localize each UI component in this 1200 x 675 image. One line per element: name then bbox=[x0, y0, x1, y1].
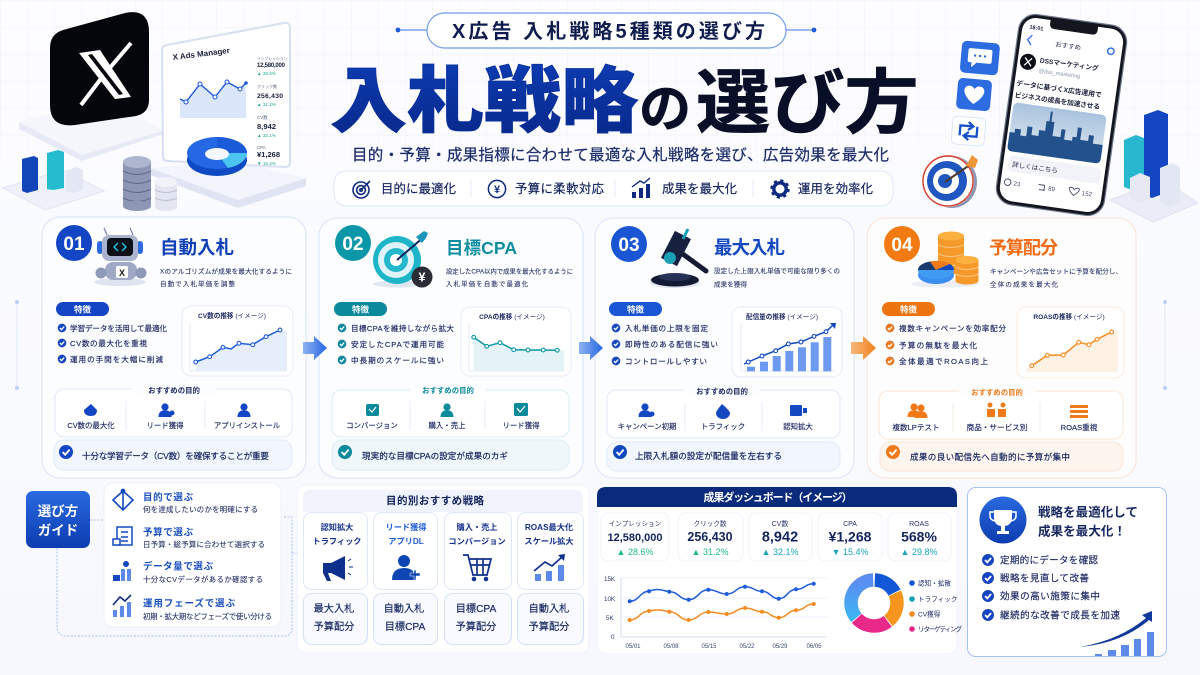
panel metrics bbox=[257, 56, 287, 166]
line chart: ROAS trend: ROASの推移 (イメージ) bbox=[1033, 312, 1105, 321]
line chart: weekly results: 05/29 bbox=[772, 644, 788, 650]
post actions: 152 bbox=[1081, 190, 1093, 199]
feature list bbox=[338, 323, 454, 365]
recommended goals: おすすめの目的 bbox=[971, 388, 1023, 397]
line chart: ROAS trend bbox=[1017, 307, 1124, 378]
guide connectors bbox=[57, 517, 298, 636]
feature list: 複数キャンペーンを効率配分 bbox=[899, 323, 1006, 333]
heading: 戦略を最適化して bbox=[1038, 504, 1138, 520]
KPI: clicks bbox=[678, 513, 743, 561]
feature list: 予算の無駄を最大化 bbox=[899, 340, 977, 350]
KPI: CPA bbox=[818, 513, 882, 561]
card title: 自動入札 bbox=[160, 237, 234, 258]
column 2: 目標CPA bbox=[385, 620, 425, 633]
feature list: 入札単価の上限を固定 bbox=[625, 323, 708, 333]
guide item: budget: 予算で選ぶ bbox=[143, 526, 193, 538]
bar line chart: delivery trend bbox=[732, 307, 842, 377]
growth bars and arrow bbox=[1080, 611, 1154, 656]
number badge bbox=[335, 225, 371, 261]
column 1: 認知拡大 bbox=[321, 522, 353, 532]
column 4: スケール拡大 bbox=[524, 536, 574, 546]
recommended goals: 商品・サービス別 bbox=[967, 422, 1027, 432]
icon: retweet tile bbox=[951, 116, 986, 146]
icon: gear bbox=[771, 180, 789, 198]
panel metrics: CPA bbox=[257, 145, 266, 150]
KPI: impressions: ▲ 28.6% bbox=[617, 547, 653, 557]
post link: 詳しくはこちら bbox=[1012, 160, 1059, 175]
column 1 bbox=[304, 512, 368, 644]
feature list: 全体最適でROAS向上 bbox=[899, 356, 988, 366]
feature list: 運用の手間を大幅に削減 bbox=[70, 354, 163, 364]
feature pill: 特徴 bbox=[627, 304, 644, 314]
heading: 成果を最大化！ bbox=[1038, 524, 1126, 538]
feature list: 学習データを活用して最適化 bbox=[70, 323, 167, 333]
panel metrics: 12,580,000 bbox=[257, 63, 286, 69]
heading bbox=[1038, 504, 1138, 538]
post link bbox=[1007, 155, 1102, 184]
number badge bbox=[56, 225, 92, 261]
tip: 上限入札額の設定が配信量を左右する bbox=[635, 450, 782, 461]
smartphone bbox=[994, 12, 1129, 218]
panel: optimize call to action bbox=[968, 488, 1166, 656]
icon: X logo tile bbox=[50, 12, 149, 125]
line chart: weekly results: 05/15 bbox=[701, 644, 717, 650]
illustration: smartphone and social bbox=[922, 12, 1198, 222]
KPI: clicks: 256,430 bbox=[687, 530, 733, 544]
recommended goals: 複数LPテスト bbox=[892, 422, 940, 432]
feature list bbox=[612, 323, 718, 366]
feature pill bbox=[334, 302, 387, 316]
tip: 現実的な目標CPAの設定が成果のカギ bbox=[362, 450, 508, 461]
panel line chart bbox=[180, 80, 248, 118]
card description bbox=[714, 266, 840, 288]
line chart: weekly results: 0 bbox=[611, 634, 615, 641]
panel metrics: ¥1,268 bbox=[257, 150, 280, 159]
guide item: data volume: データ量で選ぶ bbox=[143, 560, 213, 572]
card title: 予算配分 bbox=[989, 237, 1058, 258]
KPI: ROAS: ▲ 29.8% bbox=[901, 547, 937, 557]
illustration: X logo and ads manager bbox=[3, 12, 306, 211]
column 3: コンバージョン bbox=[448, 537, 506, 546]
guide item: purpose: 目的で選ぶ bbox=[143, 492, 193, 504]
card description bbox=[990, 266, 1122, 288]
recommended goals: おすすめの目的 bbox=[696, 387, 748, 396]
icon: growth bbox=[632, 178, 650, 198]
icon: chat tile bbox=[960, 40, 1000, 76]
feature list: 安定したCPAで運用可能 bbox=[351, 339, 444, 349]
card description: 成果を獲得 bbox=[714, 280, 748, 288]
section heading bbox=[303, 490, 583, 512]
action list: 効果の高い施策に集中 bbox=[1000, 590, 1100, 602]
KPI: CPA: ¥1,268 bbox=[829, 528, 872, 544]
line chart: weekly results: 05/22 bbox=[739, 644, 755, 650]
guide item: phase bbox=[113, 595, 272, 621]
guide label: 選び方 bbox=[38, 503, 78, 519]
KPI: clicks: クリック数 bbox=[694, 519, 727, 528]
line chart: CPA trend: CPAの推移 (イメージ) bbox=[479, 312, 545, 321]
KPI: impressions: インプレッション bbox=[609, 520, 662, 528]
number badge: 01 bbox=[63, 234, 85, 255]
post actions: 23 bbox=[1013, 181, 1021, 188]
donut legend: CV獲得 bbox=[918, 610, 941, 618]
feature pill bbox=[882, 302, 935, 316]
card title: 目標CPA bbox=[446, 238, 517, 258]
panel metrics: ▲ 28.6% bbox=[257, 71, 276, 76]
feature: budget: 予算に柔軟対応 bbox=[515, 181, 605, 196]
panel metrics: ▲ 32.1% bbox=[257, 133, 276, 138]
tip bbox=[607, 442, 840, 471]
recommended goals bbox=[607, 385, 840, 438]
3D donut bbox=[187, 137, 247, 176]
post city image bbox=[1007, 102, 1107, 164]
title pill bbox=[396, 13, 816, 48]
KPI: CPA: ▼ 15.4% bbox=[832, 547, 868, 557]
card 04: budget allocation bbox=[867, 218, 1136, 478]
section heading: 目的別おすすめ戦略 bbox=[386, 494, 484, 507]
icon: target with yen bbox=[373, 231, 432, 288]
icon: yen bbox=[488, 180, 506, 198]
feature: optimize: 目的に最適化 bbox=[381, 181, 456, 196]
title pill: X広告 入札戦略5種類の選び方 bbox=[452, 19, 765, 43]
card 03: max bid bbox=[595, 218, 854, 478]
phone status: 18:01 bbox=[1029, 25, 1044, 33]
number badge: 02 bbox=[342, 234, 364, 255]
series: blue bbox=[628, 582, 816, 603]
platform under X tile bbox=[19, 103, 166, 161]
panel metrics: 256,430 bbox=[257, 93, 283, 100]
post account: DSSマーケティング bbox=[1039, 56, 1100, 73]
recommended goals: リード獲得 bbox=[503, 421, 540, 430]
recommended goals: CV数の最大化 bbox=[67, 421, 115, 430]
KPI: ROAS: ROAS bbox=[909, 521, 929, 528]
feature list: 中長期のスケールに強い bbox=[351, 355, 444, 365]
column 2: アプリDL bbox=[388, 537, 424, 546]
guide item: budget: 日予算・総予算に合わせて選択する bbox=[143, 540, 265, 549]
donut legend bbox=[909, 578, 962, 634]
tip bbox=[880, 442, 1123, 471]
icon: coins and pie bbox=[911, 232, 979, 288]
recommended goals: トラフィック bbox=[701, 422, 745, 431]
card description: 自動で入札単価を調整 bbox=[160, 279, 236, 288]
line chart: weekly results: 5K bbox=[606, 615, 614, 622]
post text: データに基づくX広告運用で bbox=[1016, 78, 1103, 99]
post actions bbox=[1004, 178, 1093, 199]
guide label bbox=[26, 491, 90, 548]
feature: efficiency: 運用を効率化 bbox=[798, 182, 873, 196]
KPI: CV: ▲ 32.1% bbox=[762, 547, 798, 557]
ads manager panel bbox=[162, 23, 290, 176]
line chart: CV trend bbox=[182, 306, 293, 376]
column 3: 購入・売上 bbox=[457, 522, 497, 532]
card description bbox=[160, 266, 292, 288]
panel platform top bbox=[150, 160, 306, 200]
post actions: 89 bbox=[1048, 185, 1056, 193]
3D bars right bbox=[1124, 110, 1180, 206]
small bar platform bbox=[3, 170, 104, 210]
recommended goals: おすすめの目的 bbox=[422, 386, 474, 395]
post account: @dss_marketing bbox=[1038, 68, 1080, 80]
card description bbox=[446, 266, 573, 288]
column 4: ROAS最大化 bbox=[525, 522, 573, 532]
column 2: 自動入札 bbox=[384, 602, 424, 615]
main title bbox=[330, 61, 919, 143]
3D bars left bbox=[22, 150, 83, 193]
feature pill bbox=[609, 302, 662, 316]
guide panel bbox=[104, 483, 281, 627]
main title: の bbox=[639, 81, 691, 139]
guide item: purpose: 何を達成したいのかを明確にする bbox=[143, 505, 258, 514]
platform under panel bbox=[150, 168, 306, 208]
donut legend: リターゲティング bbox=[918, 624, 962, 634]
column 1: 予算配分 bbox=[314, 620, 354, 633]
feature pill: 特徴 bbox=[900, 304, 917, 314]
donut legend: 認知・拡散 bbox=[918, 578, 951, 588]
card description: 全体の成果を最大化 bbox=[990, 280, 1058, 288]
phone header: おすすめ bbox=[1055, 40, 1082, 52]
main title: 選び方 bbox=[696, 65, 919, 143]
KPI: impressions: 12,580,000 bbox=[607, 532, 663, 544]
panel metrics: クリック数 bbox=[257, 83, 277, 89]
feature list: コントロールしやすい bbox=[625, 357, 707, 366]
card description: 設定したCPA以内で成果を最大化するように bbox=[446, 266, 573, 276]
panel: recommended strategies bbox=[297, 485, 589, 653]
recommended goals: 認知拡大 bbox=[783, 422, 813, 431]
feature: results: 成果を最大化 bbox=[662, 182, 737, 196]
line chart: weekly results: 10K bbox=[604, 596, 616, 603]
tip: 十分な学習データ（CV数）を確保することが重要 bbox=[82, 450, 269, 461]
icon: gavel bbox=[650, 229, 706, 288]
bars platform bbox=[1110, 180, 1198, 222]
arrow: card 2 to 3 bbox=[579, 336, 603, 360]
guide item: data volume bbox=[113, 560, 263, 584]
guide item: phase: 初期・拡大期などフェーズで使い分ける bbox=[143, 612, 272, 621]
recommended goals bbox=[879, 386, 1123, 439]
column 4: 自動入札 bbox=[529, 602, 569, 615]
guide item: budget bbox=[113, 526, 265, 549]
panel metrics: 8,942 bbox=[257, 122, 276, 131]
icon: dart target bbox=[922, 155, 978, 208]
card 02: target CPA bbox=[319, 218, 583, 478]
KPI: clicks: ▲ 31.2% bbox=[692, 547, 728, 557]
tip bbox=[54, 440, 292, 470]
column 1: 最大入札 bbox=[314, 602, 354, 615]
KPI: CV: CV数 bbox=[772, 519, 788, 528]
post text: ビジネスの成長を加速させる bbox=[1014, 90, 1101, 111]
recommended goals: キャンペーン初期 bbox=[618, 422, 676, 431]
KPI: CV bbox=[749, 513, 812, 561]
arrow: card 3 to 4 bbox=[851, 336, 876, 360]
panel title: X Ads Manager bbox=[172, 46, 230, 62]
card description: 入札単価を自動で最適化 bbox=[446, 279, 529, 288]
panel: results dashboard bbox=[597, 487, 962, 654]
card description: キャンペーンや広告セットに予算を配分し、 bbox=[990, 266, 1122, 276]
guide label: ガイド bbox=[38, 523, 78, 538]
recommended goals: リード獲得 bbox=[147, 421, 184, 430]
icon: robot: X bbox=[119, 268, 125, 278]
column 4 bbox=[518, 512, 584, 644]
column 4: 予算配分 bbox=[529, 620, 569, 633]
action list bbox=[982, 554, 1120, 622]
feature list bbox=[58, 323, 167, 364]
icon: heart tile bbox=[956, 78, 992, 111]
action list: 定期的にデータを確認 bbox=[1000, 554, 1098, 566]
recommended goals: おすすめの目的 bbox=[148, 386, 200, 395]
guide item: data volume: 十分なCVデータがあるか確認する bbox=[143, 575, 263, 584]
panel metrics: ▲ 31.2% bbox=[257, 102, 276, 107]
panel metrics: インプレッション bbox=[257, 56, 287, 61]
feature pill: 特徴 bbox=[74, 304, 91, 314]
icon: trophy bbox=[980, 496, 1026, 544]
recommended goals: ROAS重視 bbox=[1061, 422, 1098, 432]
action list: 戦略を見直して改善 bbox=[1000, 572, 1089, 584]
action list: 継続的な改善で成長を加速 bbox=[1000, 610, 1120, 622]
feature pill bbox=[56, 302, 109, 316]
icon: target with yen: ¥ bbox=[419, 270, 426, 284]
card description: Xのアルゴリズムが成果を最大化するように bbox=[160, 266, 292, 276]
recommended goals: コンバージョン bbox=[346, 421, 398, 430]
feature pill: 特徴 bbox=[352, 304, 369, 314]
subtitle: 目的・予算・成果指標に合わせて最適な入札戦略を選び、広告効果を最大化 bbox=[352, 145, 889, 164]
KPI: impressions bbox=[601, 513, 669, 561]
line chart: weekly results: 06/05 bbox=[806, 644, 822, 650]
feature list: CV数の最大化を重視 bbox=[70, 338, 147, 348]
number badge bbox=[611, 226, 647, 262]
column 3: 予算配分 bbox=[456, 620, 496, 633]
column 2 bbox=[374, 512, 438, 644]
KPI: ROAS bbox=[888, 513, 951, 561]
dashboard header bbox=[597, 487, 957, 507]
main title: 入札戦略 bbox=[330, 61, 639, 141]
recommended goals: アプリインストール bbox=[214, 421, 281, 430]
line chart: weekly results bbox=[604, 576, 827, 650]
KPI: CPA: CPA bbox=[843, 521, 857, 528]
card title: 最大入札 bbox=[714, 237, 785, 258]
line chart: weekly results: 05/01 bbox=[625, 644, 641, 650]
dashboard header: 成果ダッシュボード（イメージ） bbox=[704, 490, 852, 504]
KPI: CV: 8,942 bbox=[762, 530, 798, 546]
arrow: card 1 to 2 bbox=[303, 336, 327, 360]
platform top bbox=[19, 100, 166, 155]
post avatar bbox=[1019, 53, 1037, 71]
column 2: リード獲得 bbox=[386, 522, 426, 532]
tip: 成果の良い配信先へ自動的に予算が集中 bbox=[910, 451, 1070, 462]
icon: target bbox=[353, 181, 370, 198]
line chart: weekly results: 15K bbox=[604, 576, 616, 583]
recommended goals bbox=[55, 385, 292, 437]
number badge bbox=[884, 226, 920, 262]
recommended goals bbox=[332, 385, 569, 437]
recommended goals: 購入・売上 bbox=[429, 421, 466, 430]
card description: 設定した上限入札単価で可能な限り多くの bbox=[714, 266, 840, 275]
number badge: 03 bbox=[618, 235, 640, 256]
KPI: ROAS: 568% bbox=[901, 528, 937, 544]
post text bbox=[1014, 78, 1103, 111]
tip bbox=[332, 440, 569, 470]
series: orange bbox=[628, 602, 816, 622]
post account bbox=[1038, 56, 1100, 83]
icon: robot bbox=[94, 228, 146, 286]
panel metrics: CV数 bbox=[257, 114, 268, 121]
line chart: weekly results: 05/08 bbox=[663, 644, 679, 650]
coin stacks bbox=[123, 156, 177, 211]
bar line chart: delivery trend: 配信量の推移 (イメージ) bbox=[746, 312, 818, 321]
donut chart bbox=[851, 580, 897, 626]
feature list: 目標CPAを維持しながら拡大 bbox=[351, 323, 454, 333]
feature list: 即時性のある配信に強い bbox=[625, 339, 718, 349]
phone header bbox=[1027, 35, 1115, 57]
feature list bbox=[886, 323, 1006, 366]
guide item: purpose bbox=[113, 489, 258, 514]
line chart: CPA trend bbox=[461, 307, 571, 376]
column 1: トラフィック bbox=[313, 536, 361, 546]
feature bar bbox=[334, 171, 893, 206]
column 3 bbox=[444, 512, 512, 644]
guide item: phase: 運用フェーズで選ぶ bbox=[143, 598, 235, 610]
line chart: CV trend: CV数の推移 (イメージ) bbox=[198, 311, 266, 320]
column 3: 目標CPA bbox=[456, 602, 496, 615]
card 01: auto bid bbox=[42, 217, 306, 478]
panel metrics: ▼ 15.4% bbox=[257, 161, 276, 166]
icon: yen: ¥ bbox=[494, 184, 501, 196]
donut legend: トラフィック bbox=[918, 596, 957, 604]
number badge: 04 bbox=[891, 235, 913, 256]
